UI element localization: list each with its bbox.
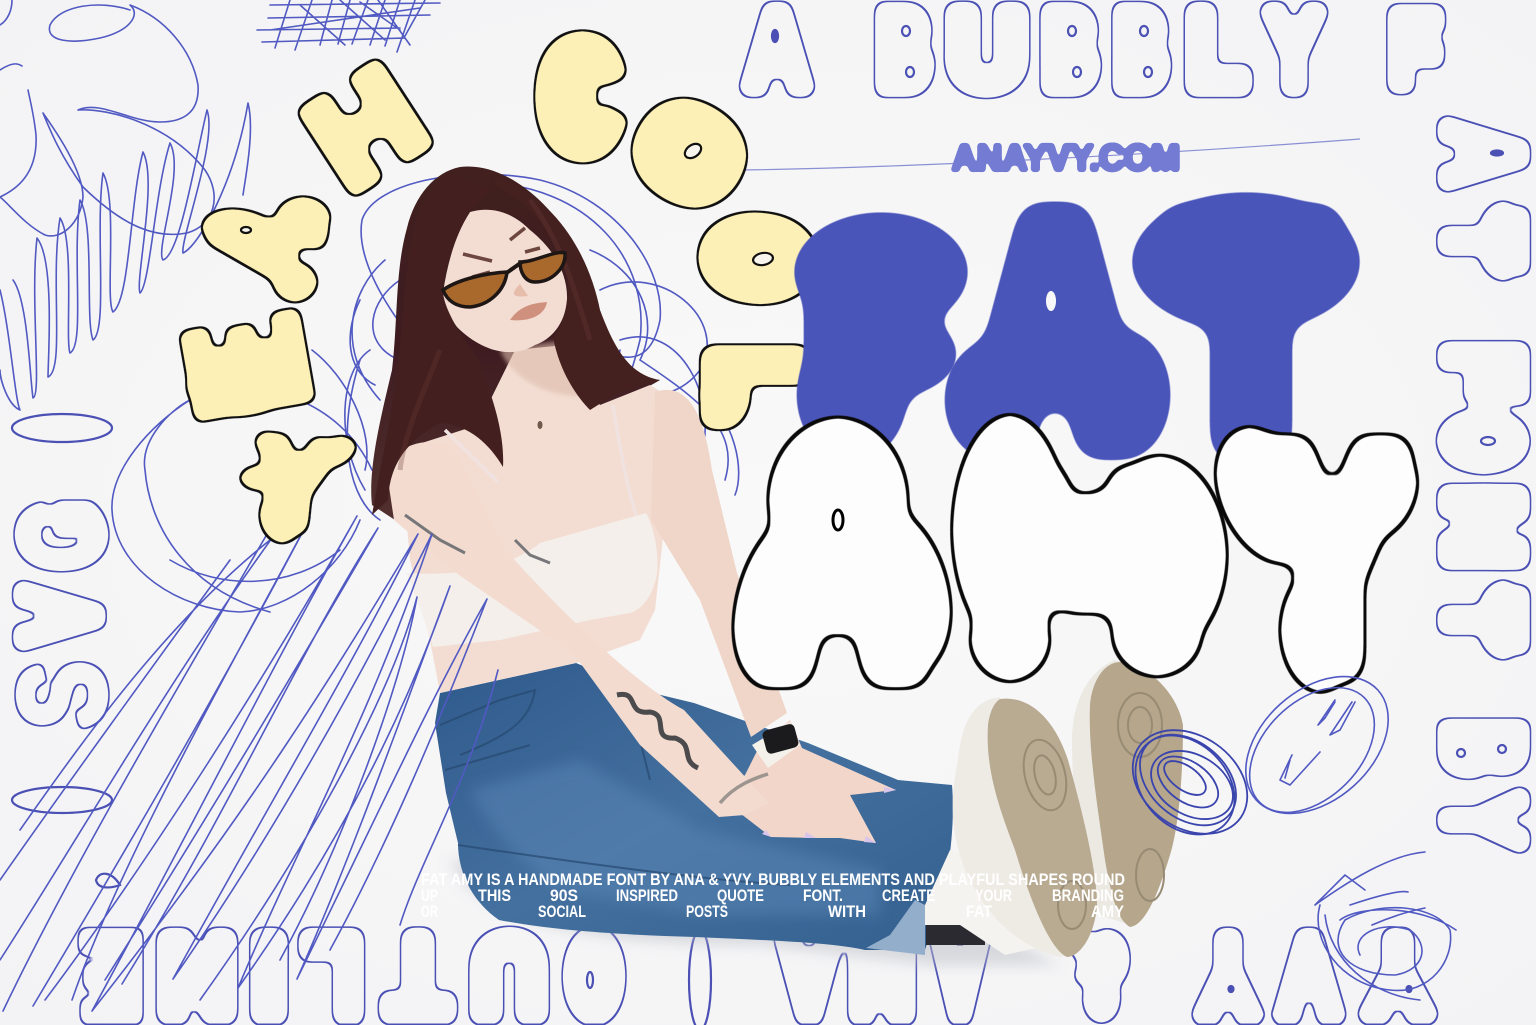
jeans highlight bbox=[470, 760, 880, 915]
website name: ANAYVY.COM bbox=[952, 137, 1180, 178]
description text: INSPIRED bbox=[616, 887, 678, 905]
description text: THIS bbox=[478, 887, 511, 905]
letter F bbox=[793, 211, 969, 463]
cream letter holes bbox=[241, 141, 774, 267]
scribble: top hatch bbox=[257, 0, 440, 52]
letter L: L bbox=[686, 348, 826, 422]
thin horizontal line bbox=[740, 139, 1360, 170]
letter O: O bbox=[711, 206, 805, 310]
sunglasses bbox=[443, 253, 565, 307]
letter F: F bbox=[810, 211, 926, 457]
cream letters: YEAH COOL bbox=[151, 7, 826, 552]
description text: 90S bbox=[550, 887, 578, 905]
top straps bbox=[445, 405, 636, 515]
letter Y bbox=[238, 416, 364, 552]
hand bbox=[723, 720, 896, 843]
letter H: H bbox=[285, 40, 447, 216]
A hole bbox=[833, 510, 843, 530]
letter T: T bbox=[1178, 169, 1324, 498]
outlined border text: bottom bbox=[80, 910, 1430, 1025]
scribbles: top left swirls bbox=[0, 0, 250, 410]
letter E: E bbox=[151, 302, 344, 432]
letter A bbox=[713, 384, 971, 725]
hair highlight bbox=[400, 200, 590, 470]
outlined border text: right: O bbox=[1434, 416, 1532, 466]
tattoo: upper arm bbox=[405, 515, 550, 563]
fingernails bbox=[762, 787, 896, 843]
letter A bbox=[944, 172, 1171, 490]
scribble: diagonal strokes bbox=[0, 474, 498, 1011]
white top bbox=[407, 513, 658, 647]
chest shadow bbox=[500, 340, 590, 396]
description text: QUOTE bbox=[717, 887, 764, 905]
letter Y: Y bbox=[1265, 400, 1399, 718]
outlined border text: left: V bbox=[2, 588, 119, 644]
hair front right bbox=[495, 175, 660, 410]
description text: WITH bbox=[828, 903, 866, 921]
title: FAT bbox=[793, 169, 1361, 498]
outlined border text: left bbox=[0, 500, 130, 729]
description text: AMY bbox=[1091, 903, 1124, 921]
jeans bbox=[435, 663, 953, 950]
scribble: dense ellipse bbox=[1113, 709, 1267, 855]
description text: BRANDING bbox=[1052, 887, 1124, 905]
watch bbox=[752, 722, 800, 768]
far arm bbox=[651, 390, 787, 737]
letter M bbox=[950, 412, 1229, 684]
description text: OR bbox=[421, 903, 438, 921]
icon: letter holes bbox=[587, 26, 1506, 992]
letter M: M bbox=[980, 439, 1196, 640]
tattoo: snake bbox=[617, 694, 698, 768]
jeans pocket detail bbox=[440, 690, 790, 885]
description text: FAT bbox=[966, 903, 992, 921]
necklace bbox=[538, 421, 542, 429]
description text: CREATE bbox=[882, 887, 935, 905]
description text: FONT. bbox=[803, 887, 843, 905]
description text: SOCIAL bbox=[538, 903, 586, 921]
letter T bbox=[1131, 169, 1361, 498]
scribble: smiley ellipse bbox=[1219, 649, 1415, 841]
outlined border text: left: G bbox=[0, 500, 125, 570]
eyes and brows bbox=[463, 228, 540, 277]
title A hole bbox=[1046, 291, 1056, 311]
near arm bbox=[388, 442, 769, 817]
letter Y bbox=[1194, 400, 1433, 718]
sock and near shoe upper bbox=[925, 850, 1050, 955]
letter C: C bbox=[537, 7, 623, 186]
letter A: A bbox=[181, 193, 349, 301]
person bbox=[371, 166, 1183, 965]
jeans cuff bbox=[866, 900, 925, 955]
shoe tread bbox=[1017, 693, 1164, 929]
scribble: bottom right bbox=[1315, 852, 1456, 1000]
title: AMY bbox=[713, 384, 1433, 725]
description text: YOUR bbox=[975, 887, 1012, 905]
letter A: A bbox=[979, 172, 1131, 490]
face bbox=[442, 210, 567, 352]
description text bbox=[421, 871, 1125, 921]
torso bbox=[400, 345, 690, 693]
separator bars bbox=[12, 414, 711, 1025]
letter O: O bbox=[624, 84, 754, 224]
floor shadow bbox=[450, 860, 1060, 965]
hair front left bbox=[372, 172, 503, 515]
outlined border text: right bbox=[1424, 122, 1536, 847]
scribble: large circle left bbox=[112, 388, 372, 612]
letter Y: Y bbox=[252, 416, 338, 552]
nose and lips bbox=[510, 284, 547, 320]
ankle shadow bbox=[926, 920, 985, 945]
scribbles: circles behind head bbox=[312, 174, 739, 520]
description text: POSTS bbox=[686, 903, 728, 921]
description text: FAT AMY IS A HANDMADE FONT BY ANA & YVY. BUBBLY ELEMENTS AND PLAYFUL SHAPES ROUND bbox=[421, 871, 1125, 889]
outlined border text: top bbox=[746, 0, 1440, 110]
near shoe bbox=[953, 697, 1097, 957]
bracelet bbox=[720, 774, 768, 803]
hair back bbox=[371, 166, 660, 520]
far shoe bbox=[1072, 660, 1183, 927]
description text: UP bbox=[421, 887, 438, 905]
letter A: A bbox=[759, 384, 917, 725]
